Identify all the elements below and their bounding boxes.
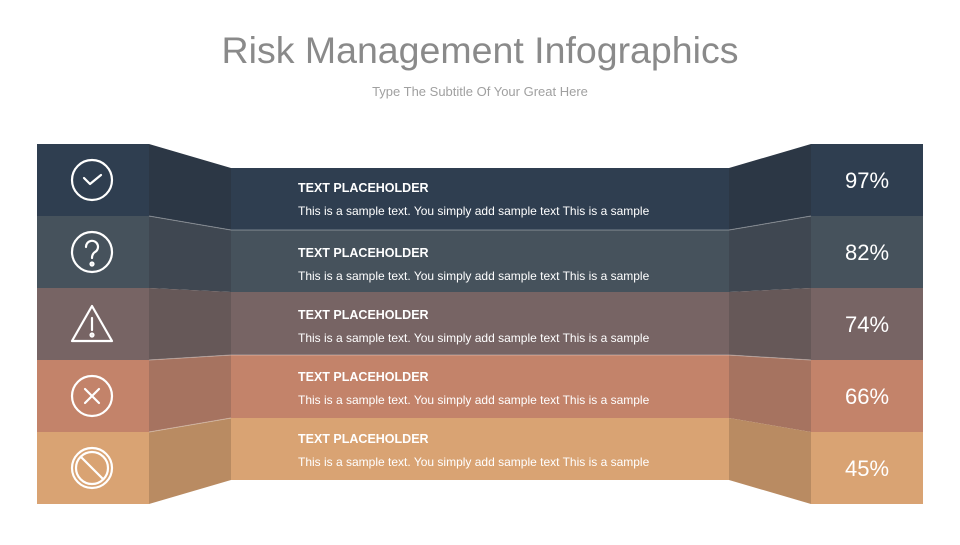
text rows [298, 181, 650, 469]
row 1 [37, 144, 923, 230]
percentages: 66% [845, 384, 889, 409]
text rows: TEXT PLACEHOLDER [298, 246, 429, 260]
text rows: This is a sample text. You simply add sample text This is a sample [298, 269, 650, 283]
icon: prohibited [72, 448, 112, 488]
icon: cross [72, 376, 112, 416]
text rows: TEXT PLACEHOLDER [298, 370, 429, 384]
text rows: This is a sample text. You simply add sample text This is a sample [298, 204, 650, 218]
title: Risk Management Infographics [222, 29, 738, 71]
row 2 [37, 216, 923, 292]
icon: check [72, 160, 112, 200]
icon: warning [72, 306, 112, 341]
percentages: 97% [845, 168, 889, 193]
percentages [845, 168, 889, 481]
percentages: 74% [845, 312, 889, 337]
row 4 [37, 355, 923, 432]
subtitle: Type The Subtitle Of Your Great Here [372, 84, 588, 99]
icon: question [72, 232, 112, 272]
text rows: This is a sample text. You simply add sample text This is a sample [298, 393, 650, 407]
row 3 [37, 288, 923, 360]
text rows: This is a sample text. You simply add sample text This is a sample [298, 455, 650, 469]
percentages: 45% [845, 456, 889, 481]
text rows: TEXT PLACEHOLDER [298, 308, 429, 322]
row 5 [37, 418, 923, 504]
text rows: This is a sample text. You simply add sample text This is a sample [298, 331, 650, 345]
text rows: TEXT PLACEHOLDER [298, 432, 429, 446]
text rows: TEXT PLACEHOLDER [298, 181, 429, 195]
percentages: 82% [845, 240, 889, 265]
